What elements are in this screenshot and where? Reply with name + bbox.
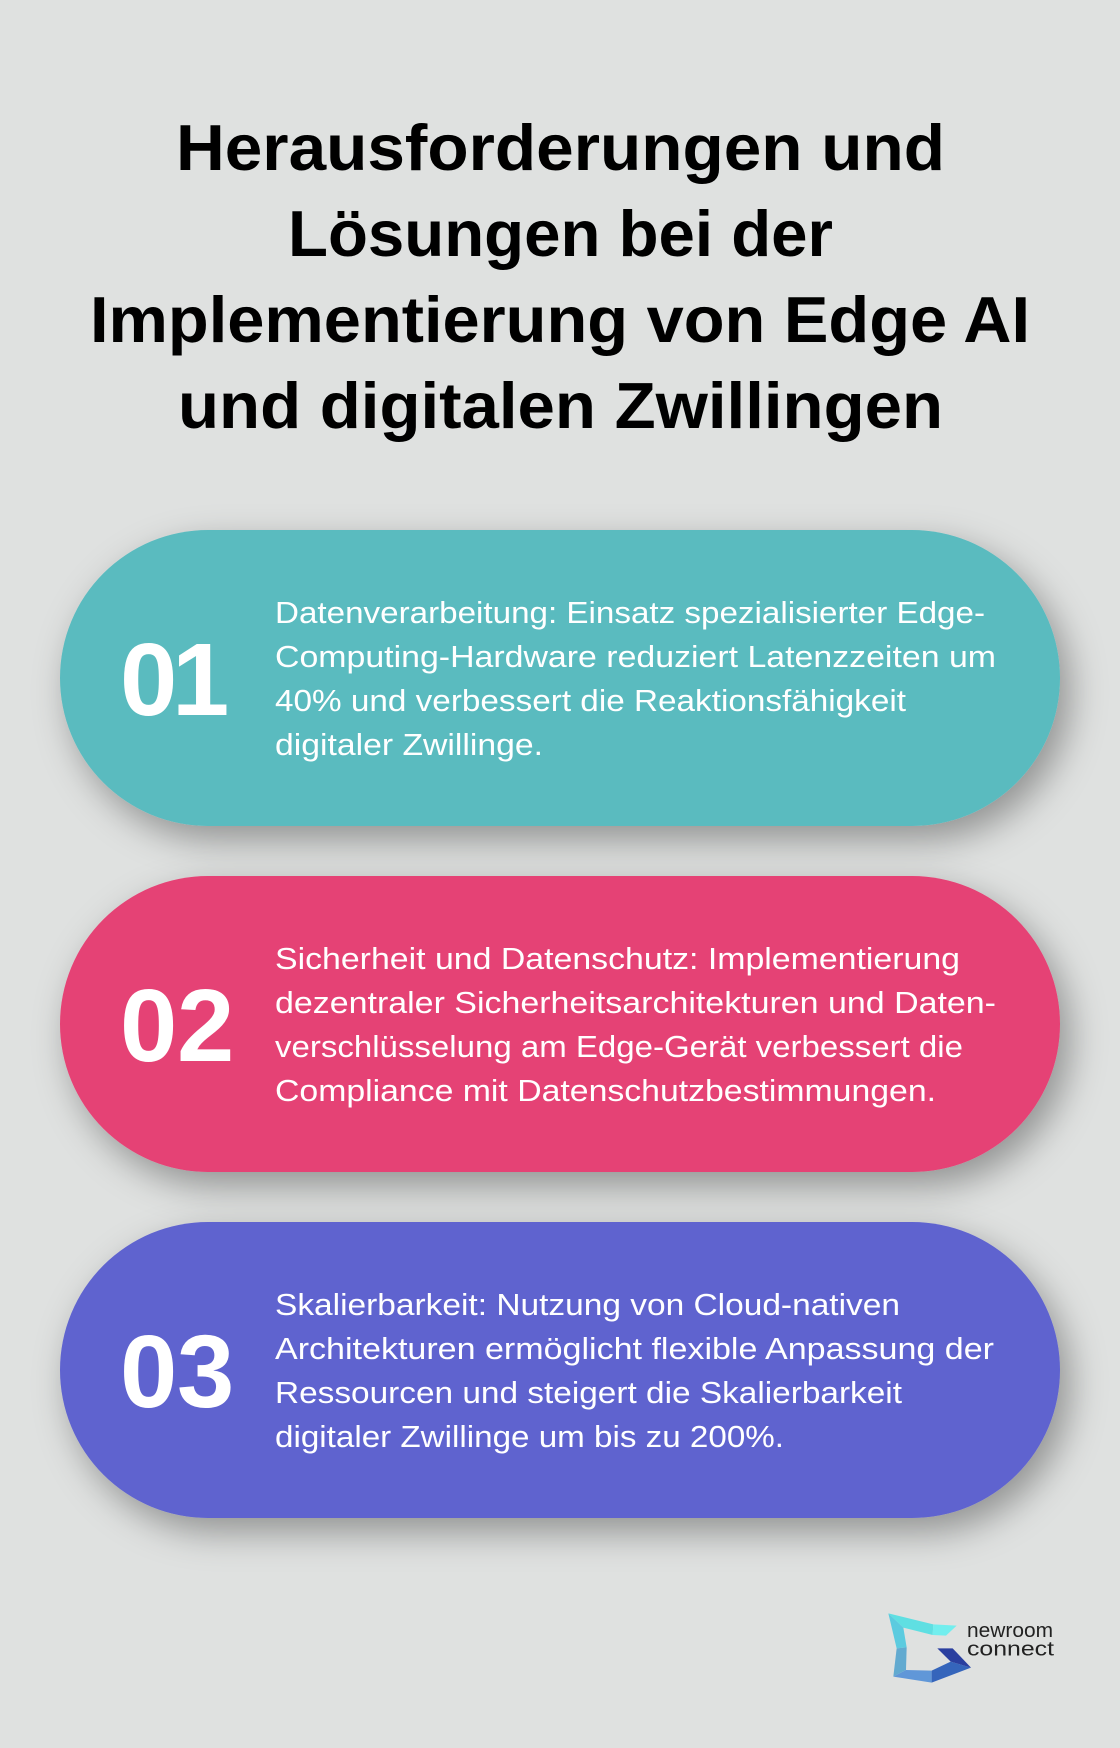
body text 02 bbox=[275, 942, 996, 1108]
title: Herausforderungen und bbox=[176, 111, 945, 184]
pill background teal bbox=[60, 530, 1060, 826]
title: Lösungen bei der bbox=[288, 197, 833, 270]
logo: newroom connect bbox=[888, 1613, 1055, 1683]
logo wordmark: connect bbox=[967, 1638, 1055, 1660]
body text 03: Ressourcen und steigert die Skalierbarkeit bbox=[275, 1376, 903, 1410]
body text 01: digitaler Zwillinge. bbox=[275, 728, 543, 762]
body text 03 bbox=[275, 1288, 994, 1454]
title: und digitalen Zwillingen bbox=[178, 369, 943, 442]
title: Implementierung von Edge AI bbox=[90, 283, 1030, 356]
title bbox=[90, 111, 1030, 442]
panel: 01 Datenverarbeitung bbox=[60, 530, 1060, 826]
body text 01 bbox=[275, 596, 996, 762]
body text 02: Sicherheit und Datenschutz: Implementierung bbox=[275, 942, 960, 976]
number 03: 03 bbox=[120, 1314, 234, 1429]
body text 03: Architekturen ermöglicht flexible Anpassung der bbox=[275, 1332, 994, 1366]
number 01: 01 bbox=[120, 622, 229, 737]
body text 01: Datenverarbeitung: Einsatz spezialisierter Edge- bbox=[275, 596, 985, 630]
logo wordmark bbox=[967, 1620, 1055, 1660]
body text 02: verschlüsselung am Edge-Gerät verbessert die bbox=[275, 1030, 963, 1064]
body text 03: digitaler Zwillinge um bis zu 200%. bbox=[275, 1420, 784, 1454]
logo wordmark: newroom bbox=[967, 1620, 1053, 1642]
body text 02: dezentraler Sicherheitsarchitekturen und Daten- bbox=[275, 986, 996, 1020]
number 02: 02 bbox=[120, 968, 234, 1083]
body text 03: Skalierbarkeit: Nutzung von Cloud-nativen bbox=[275, 1288, 900, 1322]
pill background purple bbox=[60, 1222, 1060, 1518]
icon: logo mark bbox=[888, 1613, 971, 1683]
body text 01: 40% und verbessert die Reaktionsfähigkeit bbox=[275, 684, 907, 718]
panel: 02 Sicherheit und Datenschutz bbox=[60, 876, 1060, 1172]
body text 01: Computing-Hardware reduziert Latenzzeiten um bbox=[275, 640, 996, 674]
pill background pink bbox=[60, 876, 1060, 1172]
panel: 03 Skalierbarkeit bbox=[60, 1222, 1060, 1518]
body text 02: Compliance mit Datenschutzbestimmungen. bbox=[275, 1074, 936, 1108]
